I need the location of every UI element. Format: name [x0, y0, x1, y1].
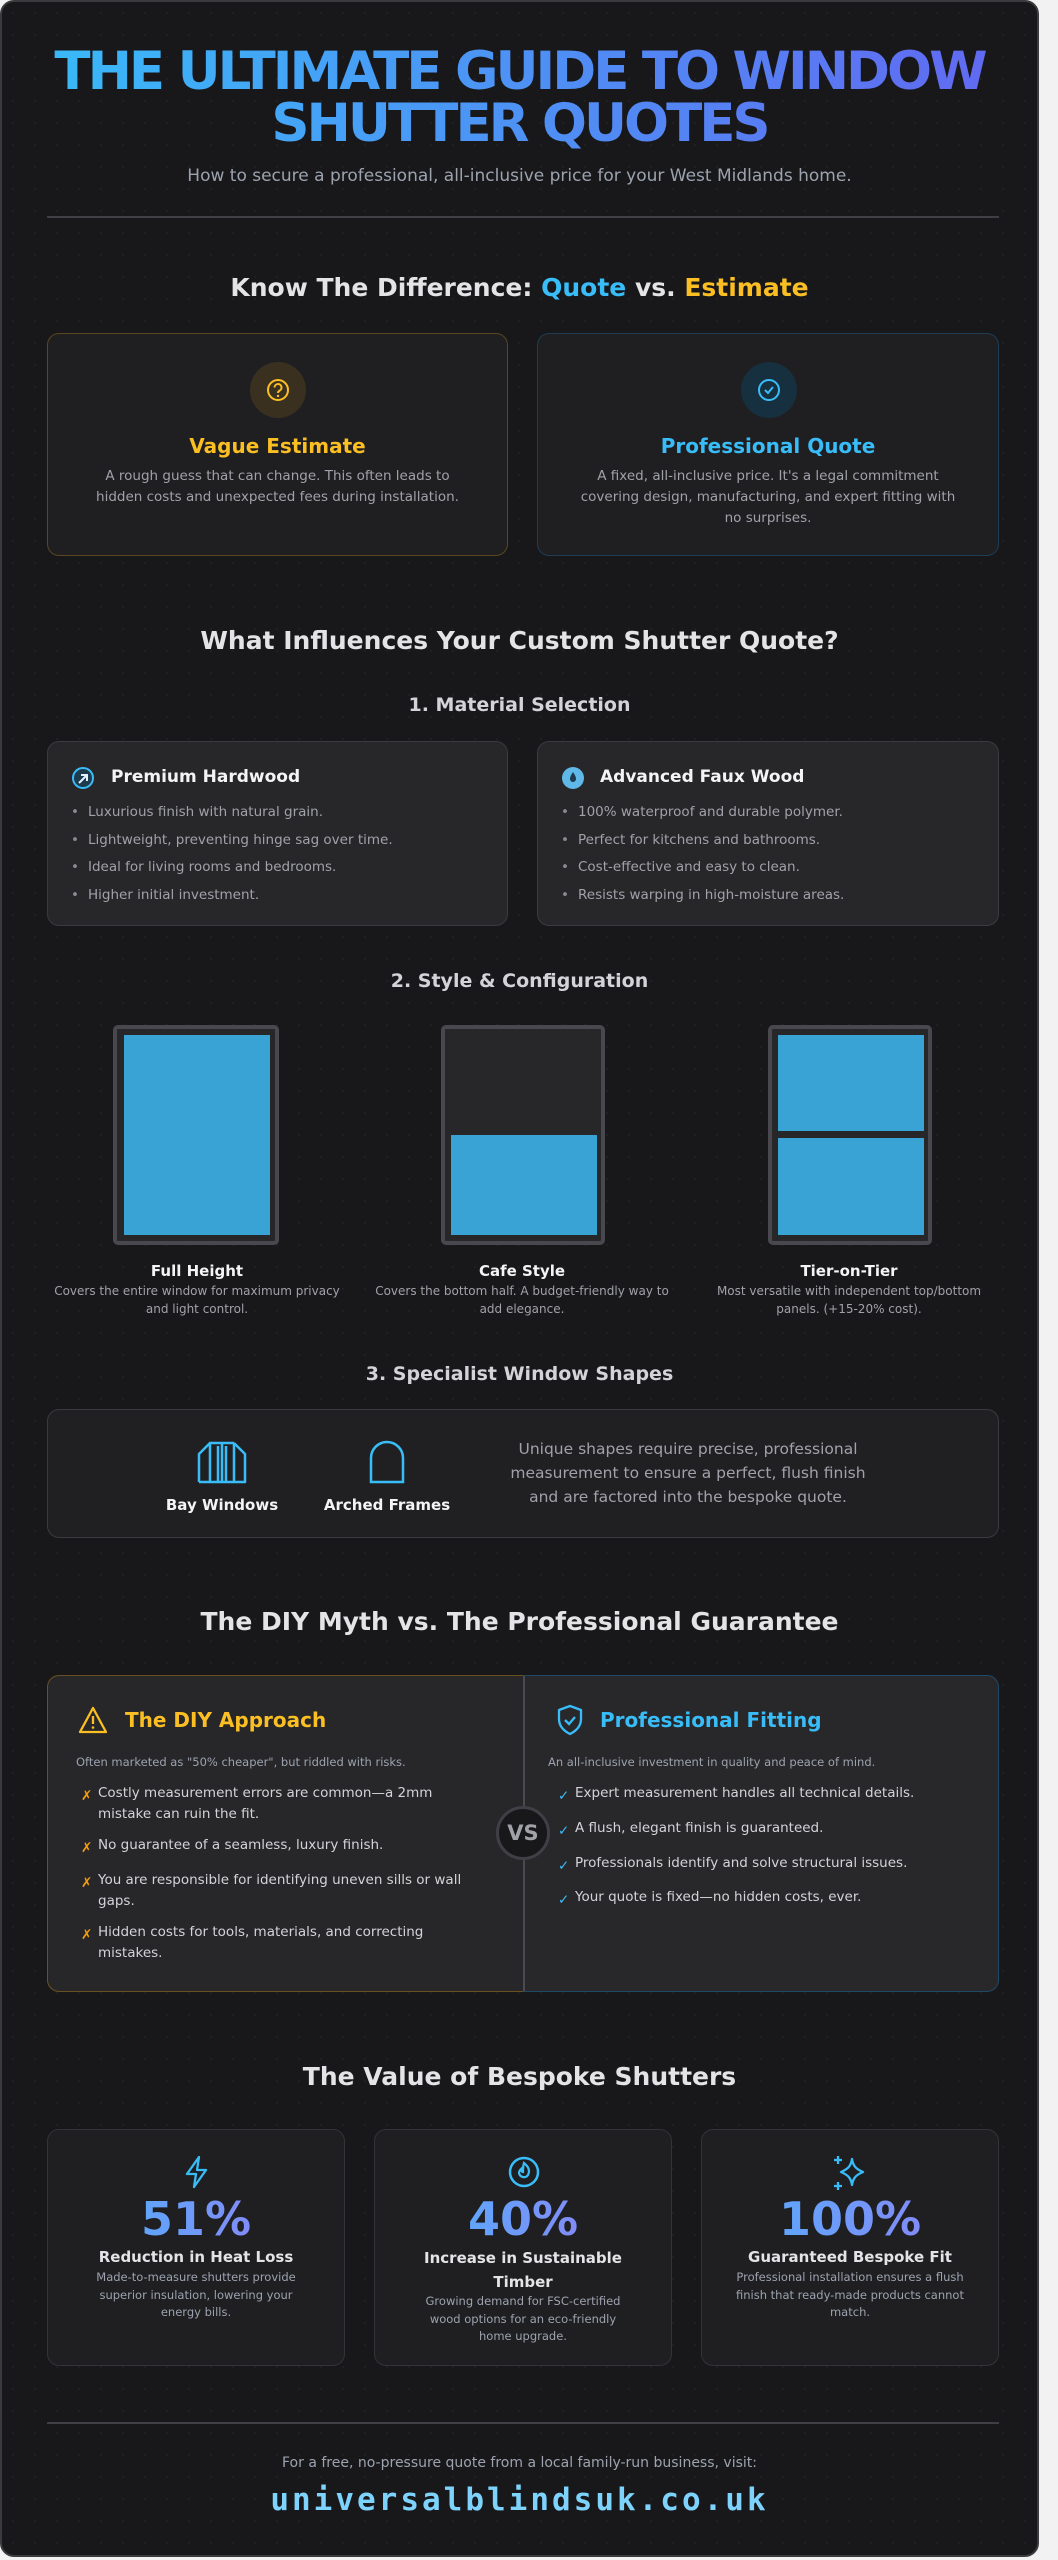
label: Reduction in Heat Loss — [99, 2248, 293, 2266]
card: faux wood: Resists warping in high-moisture areas. — [578, 887, 844, 903]
icon: shield — [558, 1704, 582, 1736]
list — [81, 1785, 461, 1961]
card: faux wood: • — [561, 887, 569, 903]
label: full height: Full Height — [151, 1262, 243, 1280]
column: DIY: ✗ — [81, 1927, 92, 1943]
icon: hardwood — [72, 767, 94, 789]
icon: sparkles — [834, 2156, 864, 2190]
title: Advanced Faux Wood — [600, 767, 804, 787]
label: tier on tier: Tier-on-Tier — [800, 1262, 898, 1280]
panel: DIY vs professional — [47, 1675, 999, 1992]
window: full height — [113, 1025, 279, 1245]
title: SHUTTER QUOTES — [271, 93, 768, 154]
description: Made-to-measure shutters provide superior insulation, lowering your energy bills. — [96, 2270, 296, 2319]
column: professional: ✓ — [558, 1892, 569, 1908]
icon: arched — [370, 1440, 404, 1484]
number: 51% — [141, 2192, 251, 2246]
icon: flame — [508, 2156, 540, 2188]
card: hardwood: • — [71, 887, 79, 903]
subtitle: An all-inclusive investment in quality and peace of mind. — [548, 1755, 875, 1769]
description: Growing demand for FSC-certified wood options for an eco-friendly home upgrade. — [426, 2294, 620, 2343]
column: professional: ✓ — [558, 1823, 569, 1839]
title: Vague Estimate — [189, 434, 366, 458]
label: cafe style: Cafe Style — [479, 1262, 565, 1280]
card: faux wood: Perfect for kitchens and bathrooms. — [578, 832, 820, 848]
column: professional: A flush, elegant finish is guaranteed. — [575, 1820, 823, 1836]
icon: lightning — [186, 2156, 208, 2188]
column: DIY: No guarantee of a seamless, luxury finish. — [98, 1837, 383, 1853]
column: DIY: Hidden costs for tools, materials, and correcting mistakes. — [98, 1924, 423, 1961]
icon: bay window — [198, 1442, 246, 1484]
bullet list — [71, 804, 393, 903]
card: vague estimate — [47, 333, 508, 556]
label: full height — [54, 1262, 340, 1316]
number: 40% — [468, 2192, 578, 2246]
description: Professional installation ensures a flush finish that ready-made products cannot match. — [736, 2270, 964, 2319]
card: faux wood: • — [561, 804, 569, 820]
card: hardwood: Higher initial investment. — [88, 887, 259, 903]
column: DIY: You are responsible for identifying uneven sills or wall gaps. — [98, 1872, 461, 1909]
heading: DIY: The DIY Myth vs. The Professional Guarantee — [200, 1607, 839, 1636]
card: hardwood: Ideal for living rooms and bedrooms. — [88, 859, 336, 875]
label: Guaranteed Bespoke Fit — [748, 2248, 952, 2266]
list — [558, 1785, 914, 1908]
heading: influences: What Influences Your Custom Shutter Quote? — [200, 626, 839, 655]
label: bay: Bay Windows — [166, 1496, 278, 1514]
column: professional — [523, 1675, 999, 1992]
stat card: heat loss — [47, 2129, 345, 2366]
label: arched: Arched Frames — [324, 1496, 450, 1514]
icon: check — [741, 362, 797, 418]
subheading: material: 1. Material Selection — [408, 694, 630, 716]
subtitle: How to secure a professional, all-inclusive price for your West Midlands home. — [187, 166, 852, 186]
column: professional: ✓ — [558, 1788, 569, 1804]
column: professional: ✓ — [558, 1858, 569, 1874]
column: professional: Expert measurement handles all technical details. — [575, 1785, 914, 1801]
text: A fixed, all-inclusive price. It's a legal commitment covering design, manufacturing, and expert fitting with no surprises. — [581, 468, 955, 526]
stat card: timber — [374, 2129, 672, 2366]
footer url: universalblindsuk.co.uk — [270, 2482, 769, 2518]
title: THE ULTIMATE GUIDE TO WINDOW — [54, 41, 985, 102]
card: hardwood: Lightweight, preventing hinge sag over time. — [88, 832, 393, 848]
title: Professional Quote — [661, 434, 875, 458]
title: Premium Hardwood — [111, 767, 300, 787]
title: Professional Fitting — [600, 1708, 822, 1732]
card: hardwood: • — [71, 859, 79, 875]
card: hardwood: • — [71, 804, 79, 820]
label: full height: Covers the entire window for maximum privacy and light control. — [54, 1284, 340, 1316]
badge: VS: VS — [507, 1821, 539, 1845]
stat card: fit — [701, 2129, 999, 2366]
window: tier on tier — [768, 1025, 932, 1245]
label: tier on tier: Most versatile with independent top/bottom panels. (+15-20% cost). — [717, 1284, 981, 1316]
subtitle: Often marketed as "50% cheaper", but riddled with risks. — [76, 1755, 406, 1769]
card: hardwood — [47, 741, 508, 926]
label: Increase in Sustainable Timber — [424, 2249, 622, 2291]
card: faux wood: 100% waterproof and durable polymer. — [578, 804, 843, 820]
column: professional: Your quote is fixed—no hidden costs, ever. — [575, 1889, 861, 1905]
card: professional quote — [537, 333, 999, 556]
label: cafe style: Covers the bottom half. A budget-friendly way to add elegance. — [375, 1284, 669, 1316]
bullet list — [561, 804, 844, 903]
column: DIY: ✗ — [81, 1875, 92, 1891]
icon: warning — [78, 1706, 108, 1734]
card: faux wood — [537, 741, 999, 926]
heading: quote vs estimate: Know The Difference: Quote vs. Estimate — [230, 273, 809, 302]
column: professional: Professionals identify and solve structural issues. — [575, 1855, 907, 1871]
panel: specialist shapes — [47, 1409, 999, 1538]
icon: question — [250, 362, 306, 418]
card: hardwood: • — [71, 832, 79, 848]
card: hardwood: Luxurious finish with natural grain. — [88, 804, 323, 820]
card: faux wood: • — [561, 832, 569, 848]
title: The DIY Approach — [125, 1708, 326, 1732]
subheading: shapes: 3. Specialist Window Shapes — [366, 1363, 673, 1385]
column: DIY: ✗ — [81, 1788, 92, 1804]
column: DIY: Costly measurement errors are common—a 2mm mistake can ruin the fit. — [98, 1785, 432, 1822]
column: DIY: ✗ — [81, 1840, 92, 1856]
footer text: For a free, no-pressure quote from a local family-run business, visit: — [282, 2455, 757, 2471]
card: faux wood: • — [561, 859, 569, 875]
number: 100% — [779, 2192, 921, 2246]
card: faux wood: Cost-effective and easy to clean. — [578, 859, 800, 875]
column: DIY — [47, 1675, 523, 1992]
window: cafe style — [441, 1025, 605, 1245]
heading: value: The Value of Bespoke Shutters — [303, 2062, 736, 2091]
badge: VS — [496, 1806, 550, 1860]
text: A rough guess that can change. This often leads to hidden costs and unexpected fees during installation. — [96, 468, 459, 505]
icon: water — [562, 767, 584, 789]
label: cafe style — [375, 1262, 669, 1316]
title — [2, 46, 1037, 150]
text: Unique shapes require precise, professional measurement to ensure a perfect, flush finish and are factored into the bespoke quote. — [510, 1440, 866, 1506]
label: tier on tier — [717, 1262, 981, 1316]
subheading: style: 2. Style & Configuration — [391, 970, 648, 992]
